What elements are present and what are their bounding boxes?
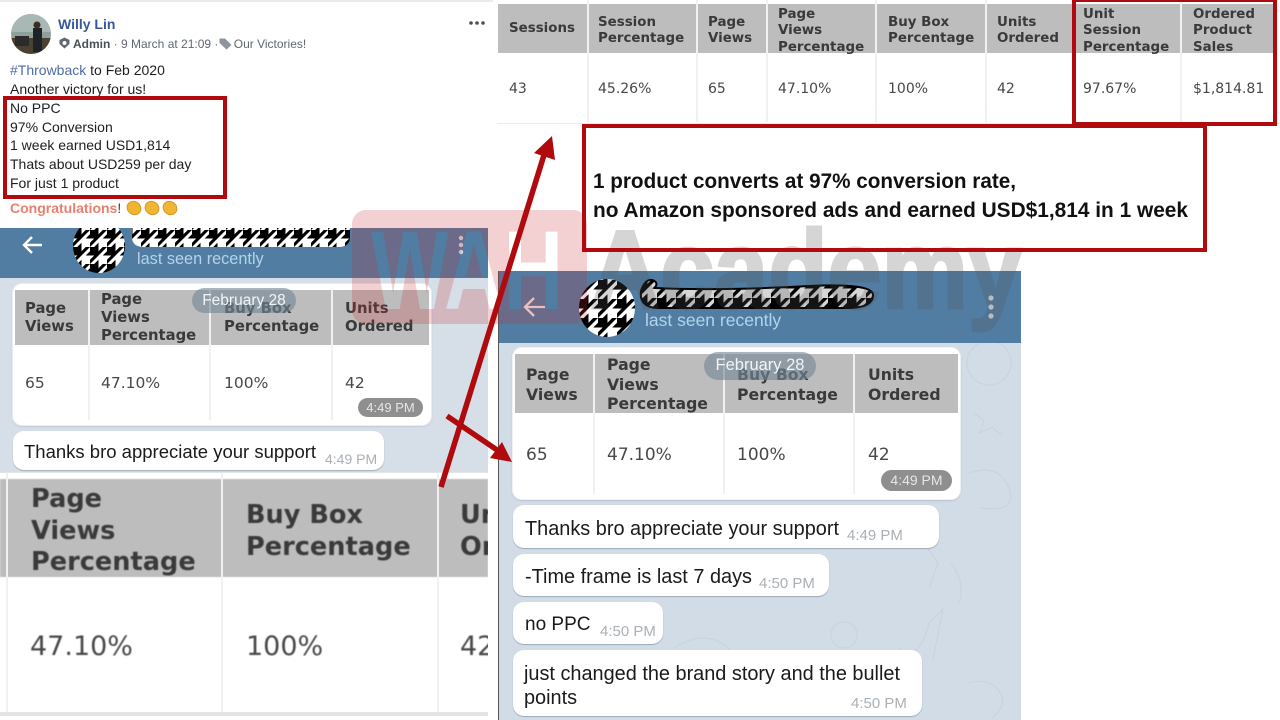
- zoomed value: 47.10%: 47.10%: [30, 631, 133, 662]
- header: units ordered: Units Ordered: [997, 15, 1059, 46]
- date pill: February 28: [202, 292, 286, 309]
- message bubble: time frame: [513, 554, 829, 596]
- header: buy box percentage: Buy Box Percentage: [224, 300, 319, 334]
- message bubble: thanks: [513, 505, 939, 548]
- callout text: [593, 169, 1188, 222]
- last seen status: last seen recently: [645, 310, 781, 330]
- chat header bar: [499, 271, 1022, 343]
- message bubble: brand story: [513, 650, 922, 716]
- header: buy box percentage: Buy Box Percentage: [888, 15, 974, 46]
- header: ordered product sales: Ordered Product Sales: [1193, 7, 1255, 55]
- table header band: [15, 290, 429, 345]
- shared table screenshot card: [13, 284, 431, 425]
- icon: menu dots: [988, 295, 994, 319]
- time pill: [881, 470, 952, 491]
- watermark: WAH badge: [352, 210, 587, 324]
- redacted contact name and avatar: [579, 278, 874, 337]
- value: page views percentage: 47.10%: [778, 81, 831, 97]
- message text: Thanks bro appreciate your support: [525, 518, 839, 540]
- value: ordered product sales: $1,814.81: [1193, 81, 1264, 97]
- value: 100%: 100%: [224, 374, 268, 392]
- time pill: [358, 398, 423, 417]
- metrics column separators: [587, 0, 1182, 122]
- panel: left telegram chat: [0, 228, 488, 472]
- panel: zoomed table crop: [0, 472, 488, 716]
- zoomed value: 100%: 100%: [246, 631, 323, 662]
- icon: menu dots: [458, 236, 464, 254]
- post metadata: Admin · 9 March at 21:09 · Our Victories!: [73, 37, 306, 51]
- zoomed column separators: [6, 473, 439, 712]
- redacted contact name and avatar: [73, 228, 350, 273]
- value: 42: 42: [345, 374, 365, 392]
- panel: right telegram chat: [498, 271, 1021, 720]
- highlight box: conversion and sales columns: [1072, 0, 1277, 126]
- callout text: 1 product converts at 97% conversion rate,: [593, 169, 1016, 193]
- message text: just changed the brand story and the bullet points: [524, 663, 900, 709]
- message time: 4:50 PM: [851, 695, 907, 712]
- post line: conversion: 97% Conversion: [10, 119, 113, 135]
- header: page views: Page Views: [526, 365, 578, 404]
- header: page views: Page Views: [708, 15, 752, 46]
- post line: no ppc: No PPC: [10, 100, 61, 116]
- panel: top seller metrics table: [497, 0, 1280, 124]
- value: 47.10%: 47.10%: [607, 445, 672, 465]
- panel: facebook post: [0, 0, 493, 228]
- message bubble: no ppc: [513, 602, 663, 644]
- icon: back arrow: [22, 236, 42, 254]
- message text: -Time frame is last 7 days: [525, 566, 752, 588]
- post line: throwback: #Throwback to Feb 2020: [10, 62, 165, 78]
- callout: key result: [582, 124, 1207, 252]
- value: page views: 65: [708, 81, 726, 97]
- post line: victory: Another victory for us!: [10, 81, 146, 97]
- zoomed header: buy box percentage: Buy Box Percentage: [246, 500, 411, 562]
- header: page views percentage: Page Views Percentage: [607, 355, 708, 413]
- value: buy box percentage: 100%: [888, 81, 928, 97]
- icon: back arrow: [524, 297, 545, 317]
- metrics header band: [498, 4, 1276, 53]
- column separators: [88, 290, 333, 420]
- value: 65: 65: [25, 374, 45, 392]
- chat header bar: [0, 228, 488, 278]
- icon: profile avatar: [11, 14, 51, 54]
- table header band: [515, 354, 958, 413]
- header: page views: Page Views: [25, 300, 74, 334]
- zoomed header: page views percentage: Page Views Percentage: [31, 484, 196, 577]
- icon: tag: [220, 38, 232, 50]
- message time: 4:49 PM: [325, 451, 377, 467]
- post line: one product: For just 1 product: [10, 175, 119, 191]
- message text: Thanks bro appreciate your support: [24, 441, 316, 462]
- date pill: February 28: [716, 356, 804, 374]
- time pill: 4:49 PM: [366, 400, 415, 415]
- zoomed header band: [0, 479, 488, 577]
- icon: admin shield: [60, 38, 70, 48]
- last seen status: last seen recently: [137, 250, 264, 268]
- header: buy box percentage: Buy Box Percentage: [737, 365, 838, 404]
- more options dots: [469, 21, 485, 25]
- value: session percentage: 45.26%: [598, 81, 651, 97]
- watermark: Academy word: Academy: [590, 208, 1022, 332]
- post line: weekly earnings: 1 week earned USD1,814: [10, 137, 170, 153]
- date pill: [704, 352, 816, 380]
- arrow: to right chat: [446, 414, 512, 462]
- value: 65: 65: [526, 445, 548, 465]
- date pill: [192, 288, 296, 313]
- header: units ordered: Units Ordered: [868, 365, 941, 404]
- value: unit session percentage: 97.67%: [1083, 81, 1136, 97]
- header: session percentage: Session Percentage: [598, 15, 684, 46]
- message time: 4:50 PM: [759, 575, 815, 592]
- post line: daily earnings: Thats about USD259 per day: [10, 156, 191, 172]
- value: 47.10%: 47.10%: [101, 374, 160, 392]
- message time: 4:49 PM: [847, 527, 903, 544]
- header: units ordered: Units Ordered: [345, 300, 413, 334]
- message time: 4:50 PM: [600, 623, 656, 640]
- time pill: 4:49 PM: [890, 472, 943, 488]
- congratulations text: Congratulations!: [10, 200, 121, 216]
- shared table screenshot card: [513, 348, 960, 499]
- icon: clapping hands: [126, 200, 178, 216]
- header: page views percentage: Page Views Percentage: [778, 7, 864, 55]
- poster name: Willy Lin: [58, 16, 115, 32]
- column separators: [593, 354, 855, 494]
- value: 42: 42: [868, 445, 890, 465]
- watermark: WAH Academy logo: [352, 210, 1024, 332]
- value: sessions: 43: [509, 81, 527, 97]
- value: 100%: 100%: [737, 445, 786, 465]
- highlight box: post summary: [3, 96, 227, 199]
- header: page views percentage: Page Views Percentage: [101, 291, 196, 344]
- arrow: to metrics table: [438, 136, 555, 488]
- callout text: no Amazon sponsored ads and earned USD$1,814 in 1 week: [593, 198, 1188, 222]
- message text: no PPC: [525, 614, 590, 635]
- header: unit session percentage: Unit Session Percentage: [1083, 7, 1169, 55]
- value: units ordered: 42: [997, 81, 1015, 97]
- message bubble: thanks: [13, 431, 384, 470]
- header: sessions: Sessions: [509, 21, 575, 36]
